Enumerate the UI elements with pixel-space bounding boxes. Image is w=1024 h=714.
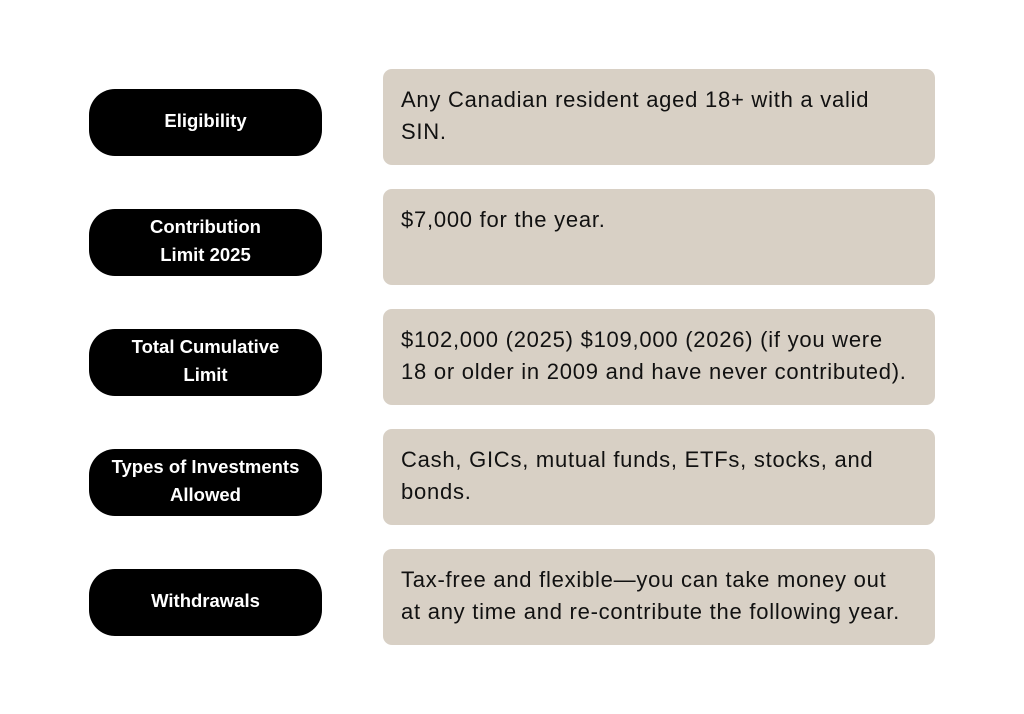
pill: Eligibility: Eligibility — [164, 110, 247, 131]
pill: Contribution Limit 2025 — [89, 209, 322, 276]
box: eligibility text — [383, 69, 935, 165]
pill: Total Cumulative Limit — [89, 329, 322, 396]
pill: Contribution Limit 2025: Limit 2025 — [160, 244, 251, 265]
pill: Types of Investments Allowed — [89, 449, 322, 516]
box: contribution text: $7,000 for the year. — [401, 207, 606, 232]
pill: Eligibility — [89, 89, 322, 156]
box: eligibility text: SIN. — [401, 119, 447, 144]
box: cumulative text: $102,000 (2025) $109,000 (2026) (if you were — [401, 327, 883, 352]
box: investments text — [383, 429, 935, 525]
box: cumulative text — [383, 309, 935, 405]
pill: Types of Investments Allowed: Types of Investments — [112, 456, 299, 477]
pill: Total Cumulative Limit: Limit — [183, 364, 228, 385]
pill: Types of Investments Allowed: Allowed — [170, 484, 241, 505]
pill: Contribution Limit 2025: Contribution — [150, 216, 261, 237]
pill: Total Cumulative Limit: Total Cumulative — [132, 336, 279, 357]
box: eligibility text: Any Canadian resident aged 18+ with a valid — [401, 87, 869, 112]
box: investments text: Cash, GICs, mutual funds, ETFs, stocks, and — [401, 447, 873, 472]
box: withdrawals text — [383, 549, 935, 645]
box: contribution text — [383, 189, 935, 285]
box: investments text: bonds. — [401, 479, 472, 504]
box: withdrawals text: at any time and re-contribute the following year. — [401, 599, 900, 624]
box: withdrawals text: Tax-free and flexible—you can take money out — [401, 567, 886, 592]
pill: Withdrawals: Withdrawals — [151, 590, 260, 611]
pill: Withdrawals — [89, 569, 322, 636]
box: cumulative text: 18 or older in 2009 and have never contributed). — [401, 359, 907, 384]
